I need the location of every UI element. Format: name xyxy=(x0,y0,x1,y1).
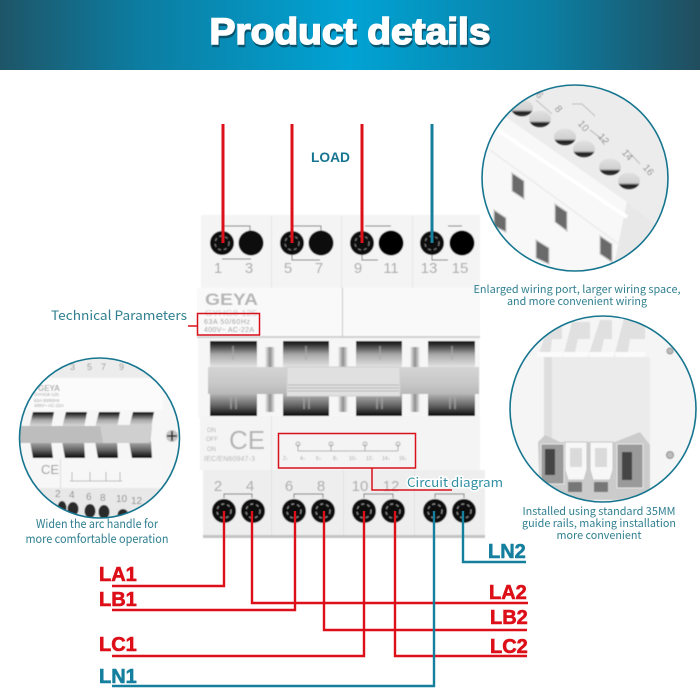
bottom terminal block: 2 xyxy=(214,478,222,495)
detail circle: arc handle: 5 xyxy=(87,362,92,372)
title: Product details xyxy=(210,11,490,52)
top terminal numbers: 9 xyxy=(354,260,362,277)
top terminal numbers: 7 xyxy=(315,260,323,277)
detail circle: arc handle: 6 xyxy=(86,492,92,503)
bottom terminal block xyxy=(203,470,485,538)
detail circle: arc handle: 400V~ AC-22A xyxy=(34,403,64,408)
lower panel xyxy=(200,416,480,470)
detail circle: arc handle: GYHG8-125 xyxy=(34,392,59,397)
handle bar xyxy=(208,367,479,396)
detail circle: arc handle: GEYA xyxy=(38,384,60,393)
caption: arc handle: more comfortable operation xyxy=(26,530,168,547)
detail circle: arc handle: 12 xyxy=(131,496,143,507)
load wires xyxy=(223,124,432,243)
detail circle: wiring port xyxy=(480,84,670,274)
breaker body xyxy=(197,215,485,538)
CE mark: CE xyxy=(229,425,265,455)
top terminal numbers: 15 xyxy=(452,260,468,277)
detail circle: arc handle: 4 xyxy=(69,490,75,501)
wire labels: LC2 xyxy=(490,636,528,658)
bottom terminal block: 8 xyxy=(317,478,325,495)
caption: wiring port: Enlarged wiring port, larger wiring space, xyxy=(474,282,681,297)
caption: arc handle xyxy=(26,515,168,547)
wiring lines xyxy=(112,511,528,686)
lower panel: 10↓ xyxy=(349,456,357,462)
header banner xyxy=(0,0,700,70)
circuit diagram callout: Circuit diagram xyxy=(407,472,503,491)
detail circle: arc handle: 7 xyxy=(101,362,106,372)
wire labels: LA2 xyxy=(489,582,527,604)
lower panel: ON xyxy=(207,447,216,453)
top terminal numbers: 1 xyxy=(214,260,222,277)
lower panel: 16↓ xyxy=(399,456,407,462)
wire labels: LB2 xyxy=(490,607,528,629)
circuit symbols xyxy=(296,442,400,451)
bottom terminal screws xyxy=(212,499,476,523)
circuit diagram callout xyxy=(278,434,503,491)
lower panel: 14↓ xyxy=(382,456,390,462)
detail circle: arc handle: 8 xyxy=(100,493,106,504)
label panel xyxy=(197,288,480,338)
technical parameters callout xyxy=(51,305,260,335)
caption: DIN rail: Installed using standard 35MM xyxy=(522,503,676,519)
detail circle: arc handle: 3 xyxy=(70,362,75,372)
lower panel: OFF xyxy=(206,437,218,443)
wire labels: LN2 xyxy=(488,541,526,563)
detail circle: arc handle: 10 xyxy=(116,494,128,505)
title: Product details xyxy=(210,14,492,54)
caption: DIN rail: more convenient xyxy=(556,527,642,543)
technical parameters callout: Technical Parameters xyxy=(51,305,187,324)
lower panel: 4↓ xyxy=(300,456,305,462)
wire labels xyxy=(99,541,528,688)
lower panel: 2↓ xyxy=(283,456,288,462)
top terminal block xyxy=(201,215,480,289)
wire labels: LN1 xyxy=(99,666,137,688)
detail circle: arc handle: CE xyxy=(41,462,59,477)
load label: LOAD xyxy=(311,150,350,165)
detail circle: arc handle xyxy=(18,357,182,522)
wire labels: LB1 xyxy=(99,589,137,611)
caption: wiring port xyxy=(474,282,681,309)
top terminal numbers: 13 xyxy=(421,260,437,277)
detail circle: wiring port: 8 xyxy=(552,104,564,115)
label panel: 400V~ AC-22A xyxy=(204,327,254,334)
detail circle: arc handle: 9 xyxy=(119,362,124,372)
bottom terminal block: 12 xyxy=(383,478,399,495)
lower panel: 8↓ xyxy=(333,456,338,462)
bottom terminal block: 6 xyxy=(285,478,293,495)
wire labels: LC1 xyxy=(99,634,137,656)
detail circle: wiring port: 16 xyxy=(640,163,656,179)
GEYA logo: GEYA xyxy=(205,291,258,309)
top terminal numbers xyxy=(214,260,468,277)
label panel: GYHG8-125 xyxy=(205,309,258,318)
caption: arc handle: Widen the arc handle for xyxy=(36,515,158,532)
bottom terminal block: 4 xyxy=(246,478,254,495)
lower panel: IEC/EN60947-3 xyxy=(204,456,255,463)
bottom terminal block: 10 xyxy=(352,478,368,495)
top terminal numbers: 5 xyxy=(284,260,292,277)
wire labels: LA1 xyxy=(99,564,137,586)
caption: DIN rail xyxy=(522,503,676,543)
detail circle: wiring port: 10 xyxy=(575,119,591,135)
detail circle: arc handle: 2 xyxy=(55,489,61,500)
top terminal numbers: 11 xyxy=(383,260,399,277)
label panel: 63A 50/60Hz xyxy=(204,319,250,326)
caption: DIN rail: guide rails, making installation xyxy=(522,515,676,531)
lower panel: 6↓ xyxy=(316,456,321,462)
lower panel: 12↓ xyxy=(366,456,374,462)
top terminal numbers: 3 xyxy=(245,260,253,277)
detail circle: DIN rail xyxy=(508,314,698,504)
caption: wiring port: and more convenient wiring xyxy=(507,294,647,309)
detail circle: wiring port: 6 xyxy=(533,90,545,101)
switch section xyxy=(198,338,480,418)
top terminal screws xyxy=(210,230,474,256)
detail circle: arc handle: 63A 50/60Hz xyxy=(34,398,61,403)
detail circle: wiring port: 12 xyxy=(595,132,611,148)
lower panel: ON xyxy=(207,428,216,434)
detail circle: wiring port: 14 xyxy=(619,148,635,164)
